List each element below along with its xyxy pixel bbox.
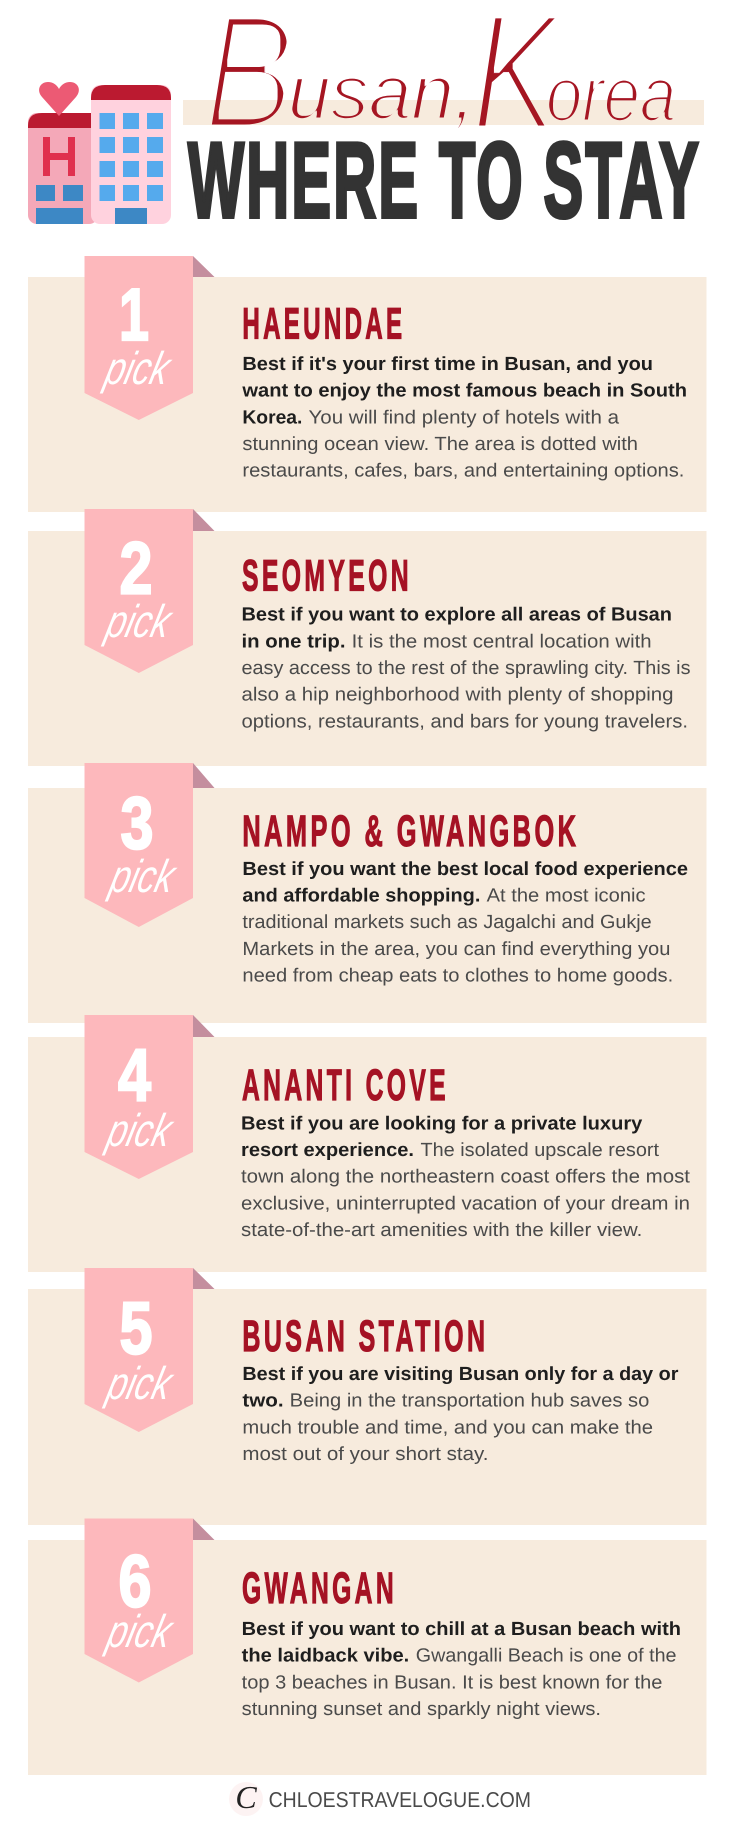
description: Best if you are visiting Busan only for a day or	[242, 1364, 679, 1385]
description: Best if you want to explore all areas of Busan	[242, 605, 672, 626]
description: stunning sunset and sparkly night views.	[242, 1699, 601, 1720]
ribbon fold	[193, 1015, 214, 1037]
area heading: HAEUNDAE	[242, 300, 405, 348]
rank number: 4	[118, 1034, 151, 1116]
panel: pick 2 Seomyeon	[28, 509, 706, 766]
description: much trouble and time, and you can make the	[242, 1417, 653, 1438]
area heading: ANANTI COVE	[242, 1061, 449, 1110]
description: Being in the transportation hub saves so	[290, 1391, 649, 1412]
rank number: 6	[118, 1540, 152, 1622]
description: Markets in the area, you can find everything you	[242, 939, 670, 960]
ribbon badge	[84, 1015, 193, 1179]
description: Gwangalli Beach is one of the	[416, 1646, 676, 1667]
description: traditional markets such as Jagalchi and Gukje	[242, 912, 652, 933]
description	[242, 1619, 681, 1720]
description: Best if you want the best local food experience	[242, 859, 688, 880]
description: options, restaurants, and bars for young travelers.	[242, 711, 688, 732]
area heading: GWANGAN	[242, 1564, 397, 1613]
description: Best if you are looking for a private luxury	[241, 1113, 643, 1134]
description: exclusive, uninterrupted vacation of your dream in	[241, 1193, 690, 1214]
title script: Busan, Korea	[203, 0, 676, 163]
pick label: pick	[100, 595, 178, 647]
ribbon fold	[193, 763, 214, 788]
panel: pick 3 Nampo and Gwangbok	[28, 763, 706, 1023]
card background	[28, 788, 706, 1023]
description: You will find plenty of hotels with a	[308, 407, 619, 428]
logo mark: C	[235, 1779, 257, 1815]
title script: Busan, Korea: orea	[546, 50, 676, 138]
description: two.	[242, 1391, 284, 1412]
description: need from cheap eats to clothes to home goods.	[242, 966, 673, 986]
ribbon fold	[193, 1268, 214, 1289]
header	[28, 0, 704, 240]
pick label: pick	[101, 1357, 179, 1409]
panel: pick 4 Ananti Cove	[28, 1015, 706, 1272]
ribbon badge	[84, 1518, 193, 1682]
panel: pick 5 Busan Station	[28, 1268, 706, 1525]
description: resort experience.	[241, 1140, 414, 1161]
pick label: pick	[101, 1104, 179, 1156]
rank number: 5	[120, 1286, 152, 1370]
description: easy access to the rest of the sprawling city. This is	[242, 658, 690, 679]
pick label: pick	[99, 342, 177, 394]
ribbon fold	[193, 1518, 214, 1540]
ribbon badge	[84, 1268, 193, 1432]
area heading: SEOMYEON	[242, 552, 412, 600]
description: most out of your short stay.	[242, 1444, 488, 1465]
area heading: BUSAN STATION	[242, 1312, 488, 1361]
panel: pick 1 Haeundae	[28, 256, 706, 512]
ribbon badge	[84, 256, 193, 420]
description	[242, 1364, 679, 1465]
description	[241, 1113, 691, 1241]
ribbon fold	[193, 509, 214, 531]
rank number: 1	[119, 273, 149, 356]
footer: site credit	[229, 1779, 531, 1816]
description: At the most iconic	[487, 886, 646, 907]
rank number: 2	[120, 526, 152, 610]
rank number: 3	[120, 782, 154, 864]
description: and affordable shopping.	[242, 886, 480, 907]
description: restaurants, cafes, bars, and entertaining options.	[242, 461, 684, 482]
description: state-of-the-art amenities with the killer view.	[241, 1220, 642, 1241]
card background	[28, 1289, 706, 1525]
description: Best if you want to chill at a Busan beach with	[242, 1619, 681, 1640]
icon: hotel buildings	[28, 82, 171, 224]
ribbon badge	[84, 509, 193, 673]
card background	[28, 531, 706, 766]
description: It is the most central location with	[352, 631, 652, 652]
description: The isolated upscale resort	[420, 1140, 660, 1161]
panel: pick 6 Gwangan	[28, 1518, 706, 1775]
description: top 3 beaches in Busan. It is best known for the	[242, 1672, 662, 1693]
card background	[28, 277, 706, 512]
description: in one trip.	[242, 631, 346, 652]
description: the laidback vibe.	[242, 1646, 409, 1667]
title band	[183, 100, 704, 125]
description	[242, 859, 688, 986]
description	[241, 354, 687, 482]
description: want to enjoy the most famous beach in South	[241, 381, 687, 402]
card background	[28, 1540, 706, 1775]
ribbon fold	[193, 256, 214, 277]
description	[242, 605, 690, 732]
description: stunning ocean view. The area is dotted with	[242, 434, 638, 455]
site name: CHLOESTRAVELOGUE.COM	[269, 1788, 531, 1812]
card background	[28, 1037, 706, 1272]
description: town along the northeastern coast offers the most	[241, 1167, 691, 1188]
logo mark	[229, 1779, 263, 1816]
description: Korea.	[242, 407, 302, 428]
ribbon badge	[84, 763, 193, 927]
pick label: pick	[101, 1605, 179, 1657]
pick label: pick	[104, 850, 182, 902]
title script: Busan, Korea: usan,	[288, 48, 475, 136]
description: Best if it's your first time in Busan, and you	[242, 354, 653, 375]
description: also a hip neighborhood with plenty of shopping	[242, 685, 674, 706]
